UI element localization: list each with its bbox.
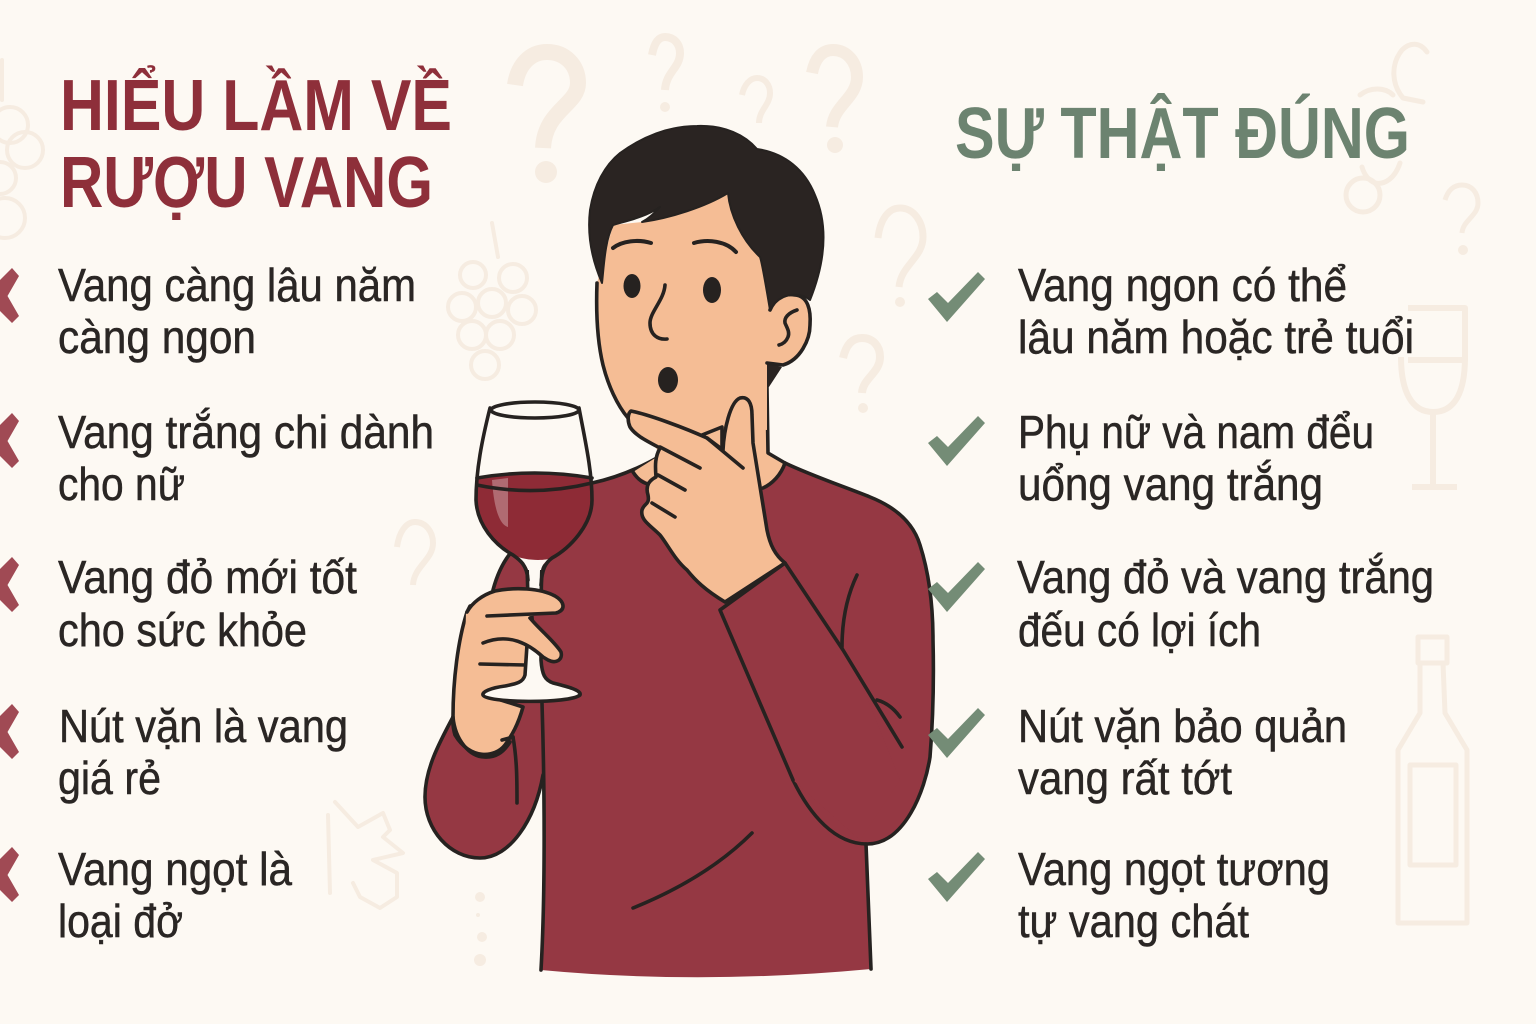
fact 1: Vang ngon có thể <box>1018 259 1347 311</box>
left hand palm <box>453 596 535 754</box>
fact 5 <box>928 843 1330 947</box>
wine highlight <box>492 478 508 527</box>
question mark large top <box>515 52 578 183</box>
glass stem <box>527 563 542 600</box>
question mark tiny top <box>742 78 770 123</box>
fact 2: Phụ nữ và nam đểu <box>1018 406 1374 458</box>
myth 5: loại đở <box>58 895 183 947</box>
ear <box>767 295 810 365</box>
grape leaf bottom left <box>328 802 403 908</box>
heading: myths: HIỂU LẦM VỀ <box>60 65 452 146</box>
hair tuft below ear <box>767 363 782 390</box>
myth 5: Vang ngọt là <box>58 843 292 895</box>
fact 3 <box>928 551 1434 656</box>
grapes left edge <box>0 60 43 238</box>
face <box>597 193 810 436</box>
myth 1: càng ngon <box>58 311 256 363</box>
wine glass <box>476 402 592 701</box>
question mark beside ear <box>843 338 880 413</box>
grapes center left <box>448 223 536 379</box>
fingers on stem <box>465 589 563 740</box>
head <box>589 126 824 436</box>
glass foot <box>483 645 580 701</box>
red wine <box>477 474 592 560</box>
glass rim <box>491 402 579 418</box>
myth 2: Vang trắng chi dành <box>58 406 434 458</box>
fact 1 <box>928 259 1414 363</box>
neck <box>633 380 785 488</box>
question mark right of head <box>812 50 857 153</box>
heading: facts: SỰ THẬT ĐÚNG <box>955 93 1410 174</box>
fact 4: vang rất tớt <box>1018 752 1232 804</box>
fact 4: Nút vặn bảo quản <box>1018 700 1347 752</box>
question mark small top <box>652 37 680 112</box>
fact 5: tự vang chát <box>1018 895 1249 947</box>
myth 2: cho nữ <box>58 458 185 510</box>
panel: myths list <box>0 259 434 947</box>
eyebrows <box>613 241 736 252</box>
left cuff line <box>453 717 510 757</box>
hand on chin <box>628 398 785 602</box>
myth 4: giá rẻ <box>58 752 161 804</box>
heading: myths: RƯỢU VANG <box>60 143 433 223</box>
wine surface <box>477 473 592 491</box>
fact 4 <box>928 700 1347 804</box>
myth 3 <box>0 551 357 656</box>
hair <box>589 126 824 310</box>
myth 4 <box>0 700 348 804</box>
glass outline <box>476 408 592 585</box>
bottle outline right <box>1398 637 1467 923</box>
myth 2 <box>0 406 434 510</box>
faint dots bottom <box>474 892 487 966</box>
glass bowl <box>476 408 592 570</box>
eyes <box>624 274 721 303</box>
fact 2 <box>928 406 1374 510</box>
fact 5: Vang ngọt tương <box>1018 843 1330 895</box>
illustration: man tasting wine <box>425 126 933 977</box>
wine glass outline right <box>1401 308 1465 487</box>
fact 2: uổng vang trắng <box>1018 458 1323 510</box>
question mark left center <box>397 522 433 585</box>
face outline <box>597 283 628 418</box>
myth 1: Vang càng lâu năm <box>58 259 416 311</box>
panel: facts list <box>928 259 1434 947</box>
heading: myths <box>60 65 452 223</box>
myth 5 <box>0 843 292 947</box>
chin line <box>702 427 722 447</box>
fact 3: Vang đỏ và vang trắng <box>1017 551 1434 603</box>
fact 1: lâu năm hoặc trẻ tuổi <box>1018 311 1414 363</box>
myth 3: Vang đỏ mới tốt <box>58 551 357 603</box>
right sleeve cuff <box>720 563 902 840</box>
myth 4: Nút vặn là vang <box>59 700 348 752</box>
fact 3: đếu có lợi ích <box>1018 604 1261 656</box>
myth 1 <box>0 259 416 363</box>
sweater <box>425 455 933 977</box>
nose <box>650 285 667 339</box>
myth 3: cho sức khỏe <box>58 604 307 656</box>
question mark far right <box>1445 185 1478 255</box>
mouth <box>658 367 678 393</box>
grapes top right <box>1346 44 1427 212</box>
question mark mid right <box>878 208 923 307</box>
